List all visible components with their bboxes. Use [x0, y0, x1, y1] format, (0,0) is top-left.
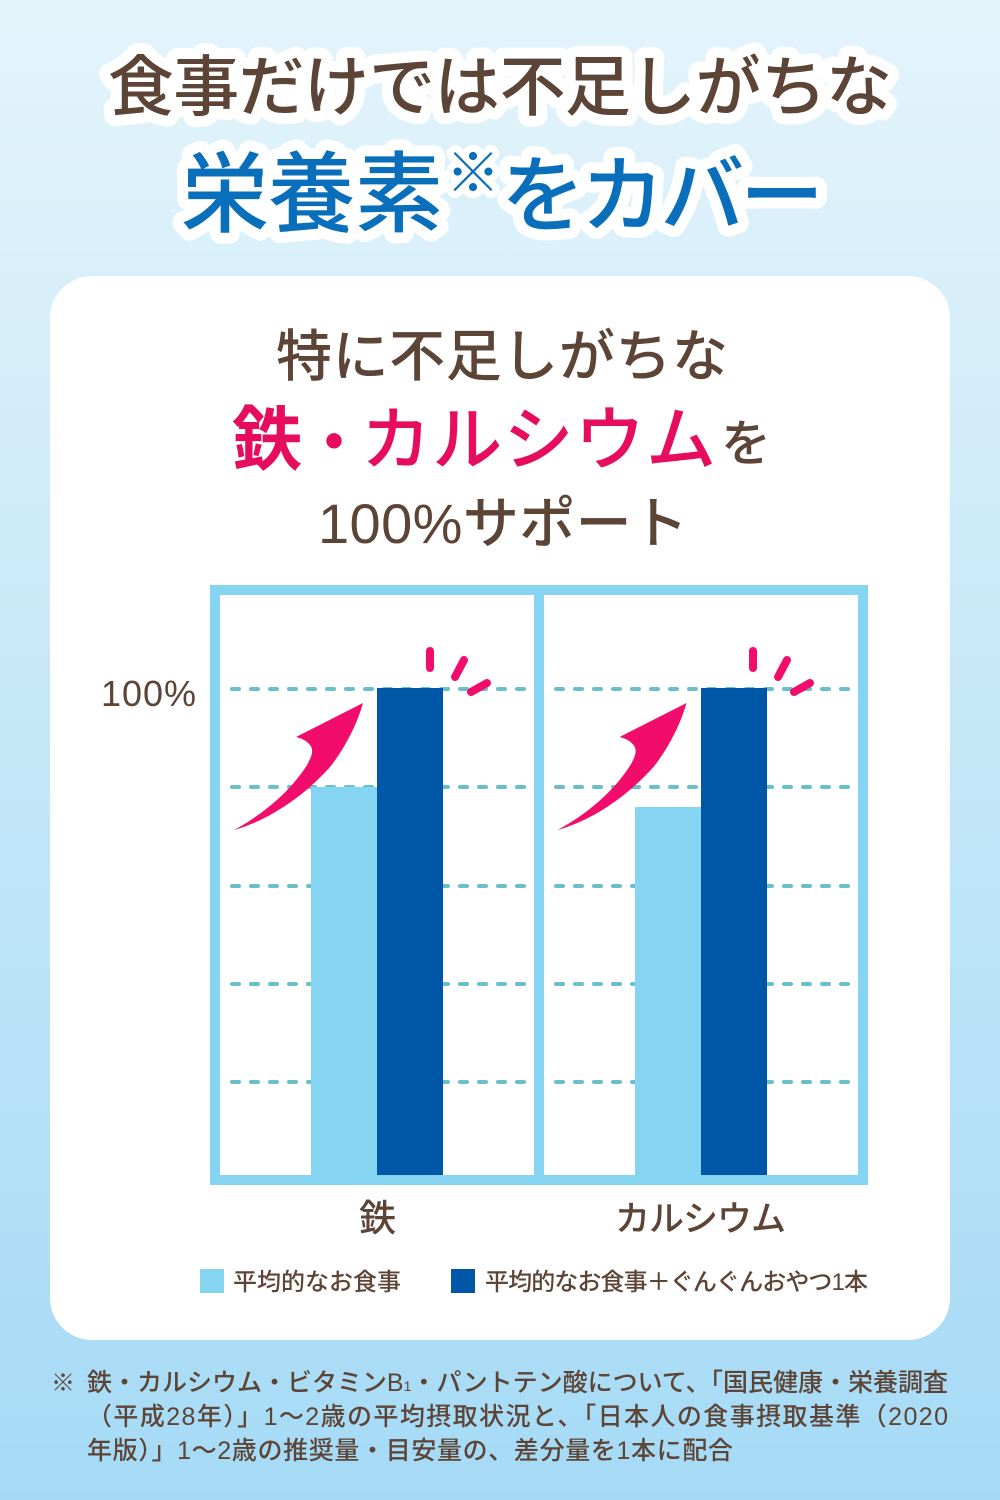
bars: calcium: [635, 688, 767, 1175]
footnote: [51, 1363, 948, 1465]
heading line 2: 鉄: [232, 384, 302, 485]
chart frame: [215, 590, 863, 1180]
footnote line 1: 鉄・カルシウム・ビタミンB1・パントテン酸について、「国民健康・栄養調査: [87, 1369, 948, 1397]
heading line 2: [232, 384, 771, 485]
title: [108, 34, 892, 251]
footnote mark: ※: [51, 1363, 75, 1398]
heading line 2: ・: [304, 395, 364, 482]
title line 2: ※: [446, 129, 500, 208]
title line 1: 食事だけでは不足しがちな: [108, 34, 892, 130]
bars: iron: [311, 688, 443, 1175]
y axis label: 100%: 100%: [101, 673, 196, 714]
accent marks: calcium: [753, 651, 810, 692]
title line 2: [181, 124, 824, 251]
panel: white card: [50, 276, 950, 1340]
category label: calcium: カルシウム: [615, 1191, 786, 1242]
arrow: calcium: [558, 703, 686, 830]
arrow: iron: [234, 703, 363, 830]
category label: iron: 鉄: [359, 1188, 396, 1242]
heading line 3: 100%サポート: [318, 492, 688, 555]
legend swatch: average meal: [200, 1269, 224, 1293]
heading line 1: 特に不足しがちな: [276, 312, 728, 393]
bar chart: [101, 590, 863, 1242]
legend: [200, 1262, 868, 1297]
panel heading: [232, 312, 771, 555]
legend label: meal plus snack: 平均的なお食事＋ぐんぐんおやつ1本: [485, 1269, 868, 1296]
accent marks: iron: [430, 651, 487, 692]
title line 2: 栄養素: [181, 124, 443, 251]
heading line 2: を: [721, 404, 771, 476]
footnote line 3: 年版）」1～2歳の推奨量・目安量の、差分量を1本に配合: [87, 1437, 733, 1465]
title line 2: をカバー: [501, 129, 824, 250]
legend label: average meal: 平均的なお食事: [233, 1262, 401, 1297]
legend swatch: meal plus snack: [451, 1269, 475, 1293]
footnote line 2: （平成28年）」1～2歳の平均摂取状況と、「日本人の食事摂取基準（2020: [87, 1403, 948, 1431]
heading line 2: カルシウム: [361, 384, 716, 485]
